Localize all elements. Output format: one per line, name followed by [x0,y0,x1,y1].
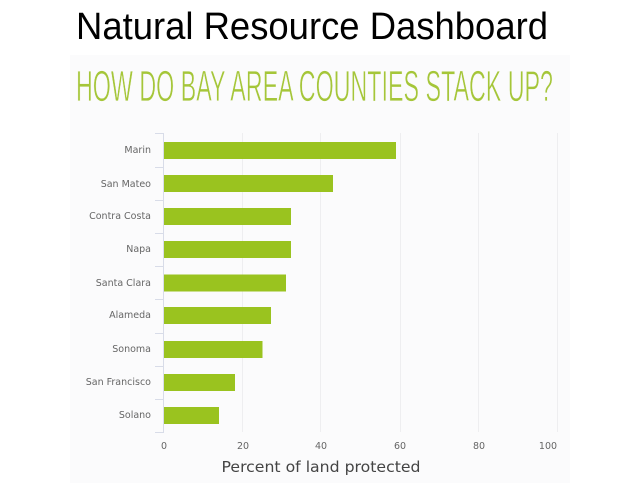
x axis tick labels: 20 [237,441,249,452]
x axis tick labels: 0 [161,441,167,452]
x axis tick labels [161,441,557,452]
x axis title: Percent of land protected [222,458,420,476]
county labels: San Mateo [101,179,151,190]
grid lines [242,133,558,432]
x axis tick labels: 60 [394,441,406,452]
bar chart [86,133,558,476]
county labels: Contra Costa [89,211,151,222]
county labels: Marin [124,145,151,156]
county labels: San Francisco [86,377,151,388]
x axis tick labels: 40 [315,441,327,452]
county labels: Alameda [109,310,151,321]
county labels: Napa [126,244,151,255]
panel: chart background [70,55,570,483]
county labels: Santa Clara [96,278,151,289]
x axis tick labels: 80 [473,441,485,452]
county labels: Sonoma [112,344,151,355]
title: Natural Resource Dashboard [76,6,548,48]
county labels: Solano [119,410,151,421]
county labels [86,145,151,421]
y axis [155,133,164,432]
bars [164,142,396,424]
x axis tick labels: 100 [539,441,557,452]
